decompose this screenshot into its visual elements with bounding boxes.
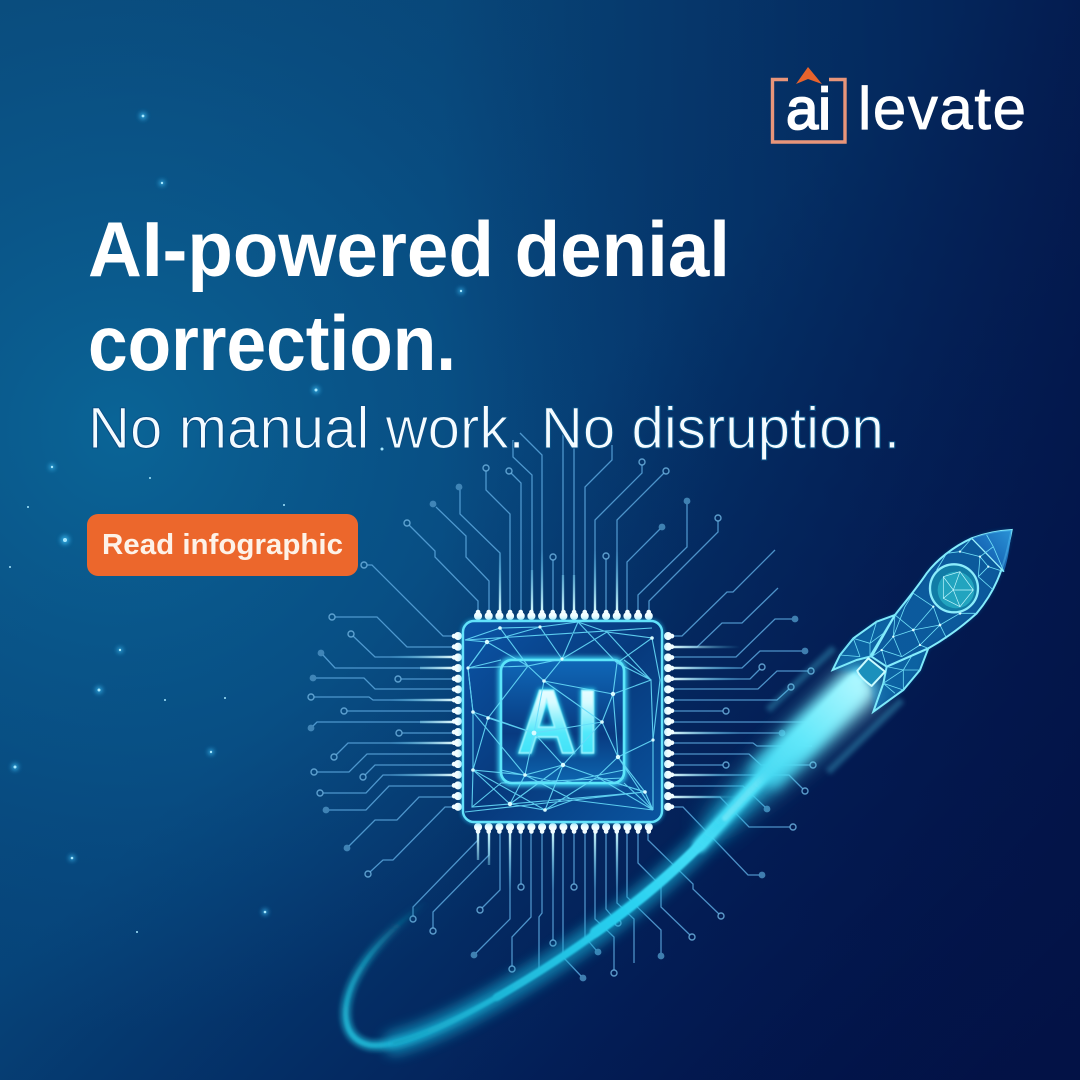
right fin: [873, 648, 928, 712]
left traces: [313, 565, 453, 872]
logo text levate: levate: [858, 75, 1026, 142]
call-to-action button: Read infographic: [102, 529, 343, 561]
trace end nodes hollow: [308, 459, 816, 976]
headline: correction.: [88, 299, 456, 387]
headline: AI-powered denial: [88, 205, 730, 293]
chip glow: [462, 620, 663, 823]
right traces: [672, 550, 812, 875]
call-to-action button: [87, 514, 358, 576]
circuit traces: [308, 430, 816, 981]
logo text ai: ai: [786, 77, 831, 142]
rocket body: [872, 530, 1012, 667]
rocket nozzle: [857, 658, 885, 686]
chip inner core glow: [501, 660, 624, 783]
bright stubs near pins: [390, 550, 740, 890]
logo arrow: [796, 67, 822, 84]
headline: [88, 205, 730, 387]
orbit trail: [346, 675, 860, 1045]
top traces: [409, 430, 718, 610]
chip network mesh: [465, 622, 660, 812]
chip body: [463, 621, 662, 822]
rocket exhaust flame: [695, 648, 902, 846]
rocket glow: [833, 530, 1012, 712]
mesh nodes: [466, 625, 655, 812]
logo bracket frame: [772, 80, 845, 142]
chip inner core: [501, 660, 624, 783]
AI lettering: AI: [517, 672, 599, 773]
starfield particles: [9, 112, 464, 933]
bottom traces: [413, 832, 719, 976]
logo: [772, 67, 1026, 142]
rocket porthole: [930, 564, 978, 612]
microchip: [454, 612, 672, 832]
trace end nodes filled: [308, 484, 808, 981]
rocket: [833, 530, 1012, 712]
AI lettering glow: AI: [517, 672, 599, 773]
chip pins: [454, 612, 672, 832]
left fin: [833, 615, 895, 670]
subheading: No manual work. No disruption.: [88, 396, 900, 461]
